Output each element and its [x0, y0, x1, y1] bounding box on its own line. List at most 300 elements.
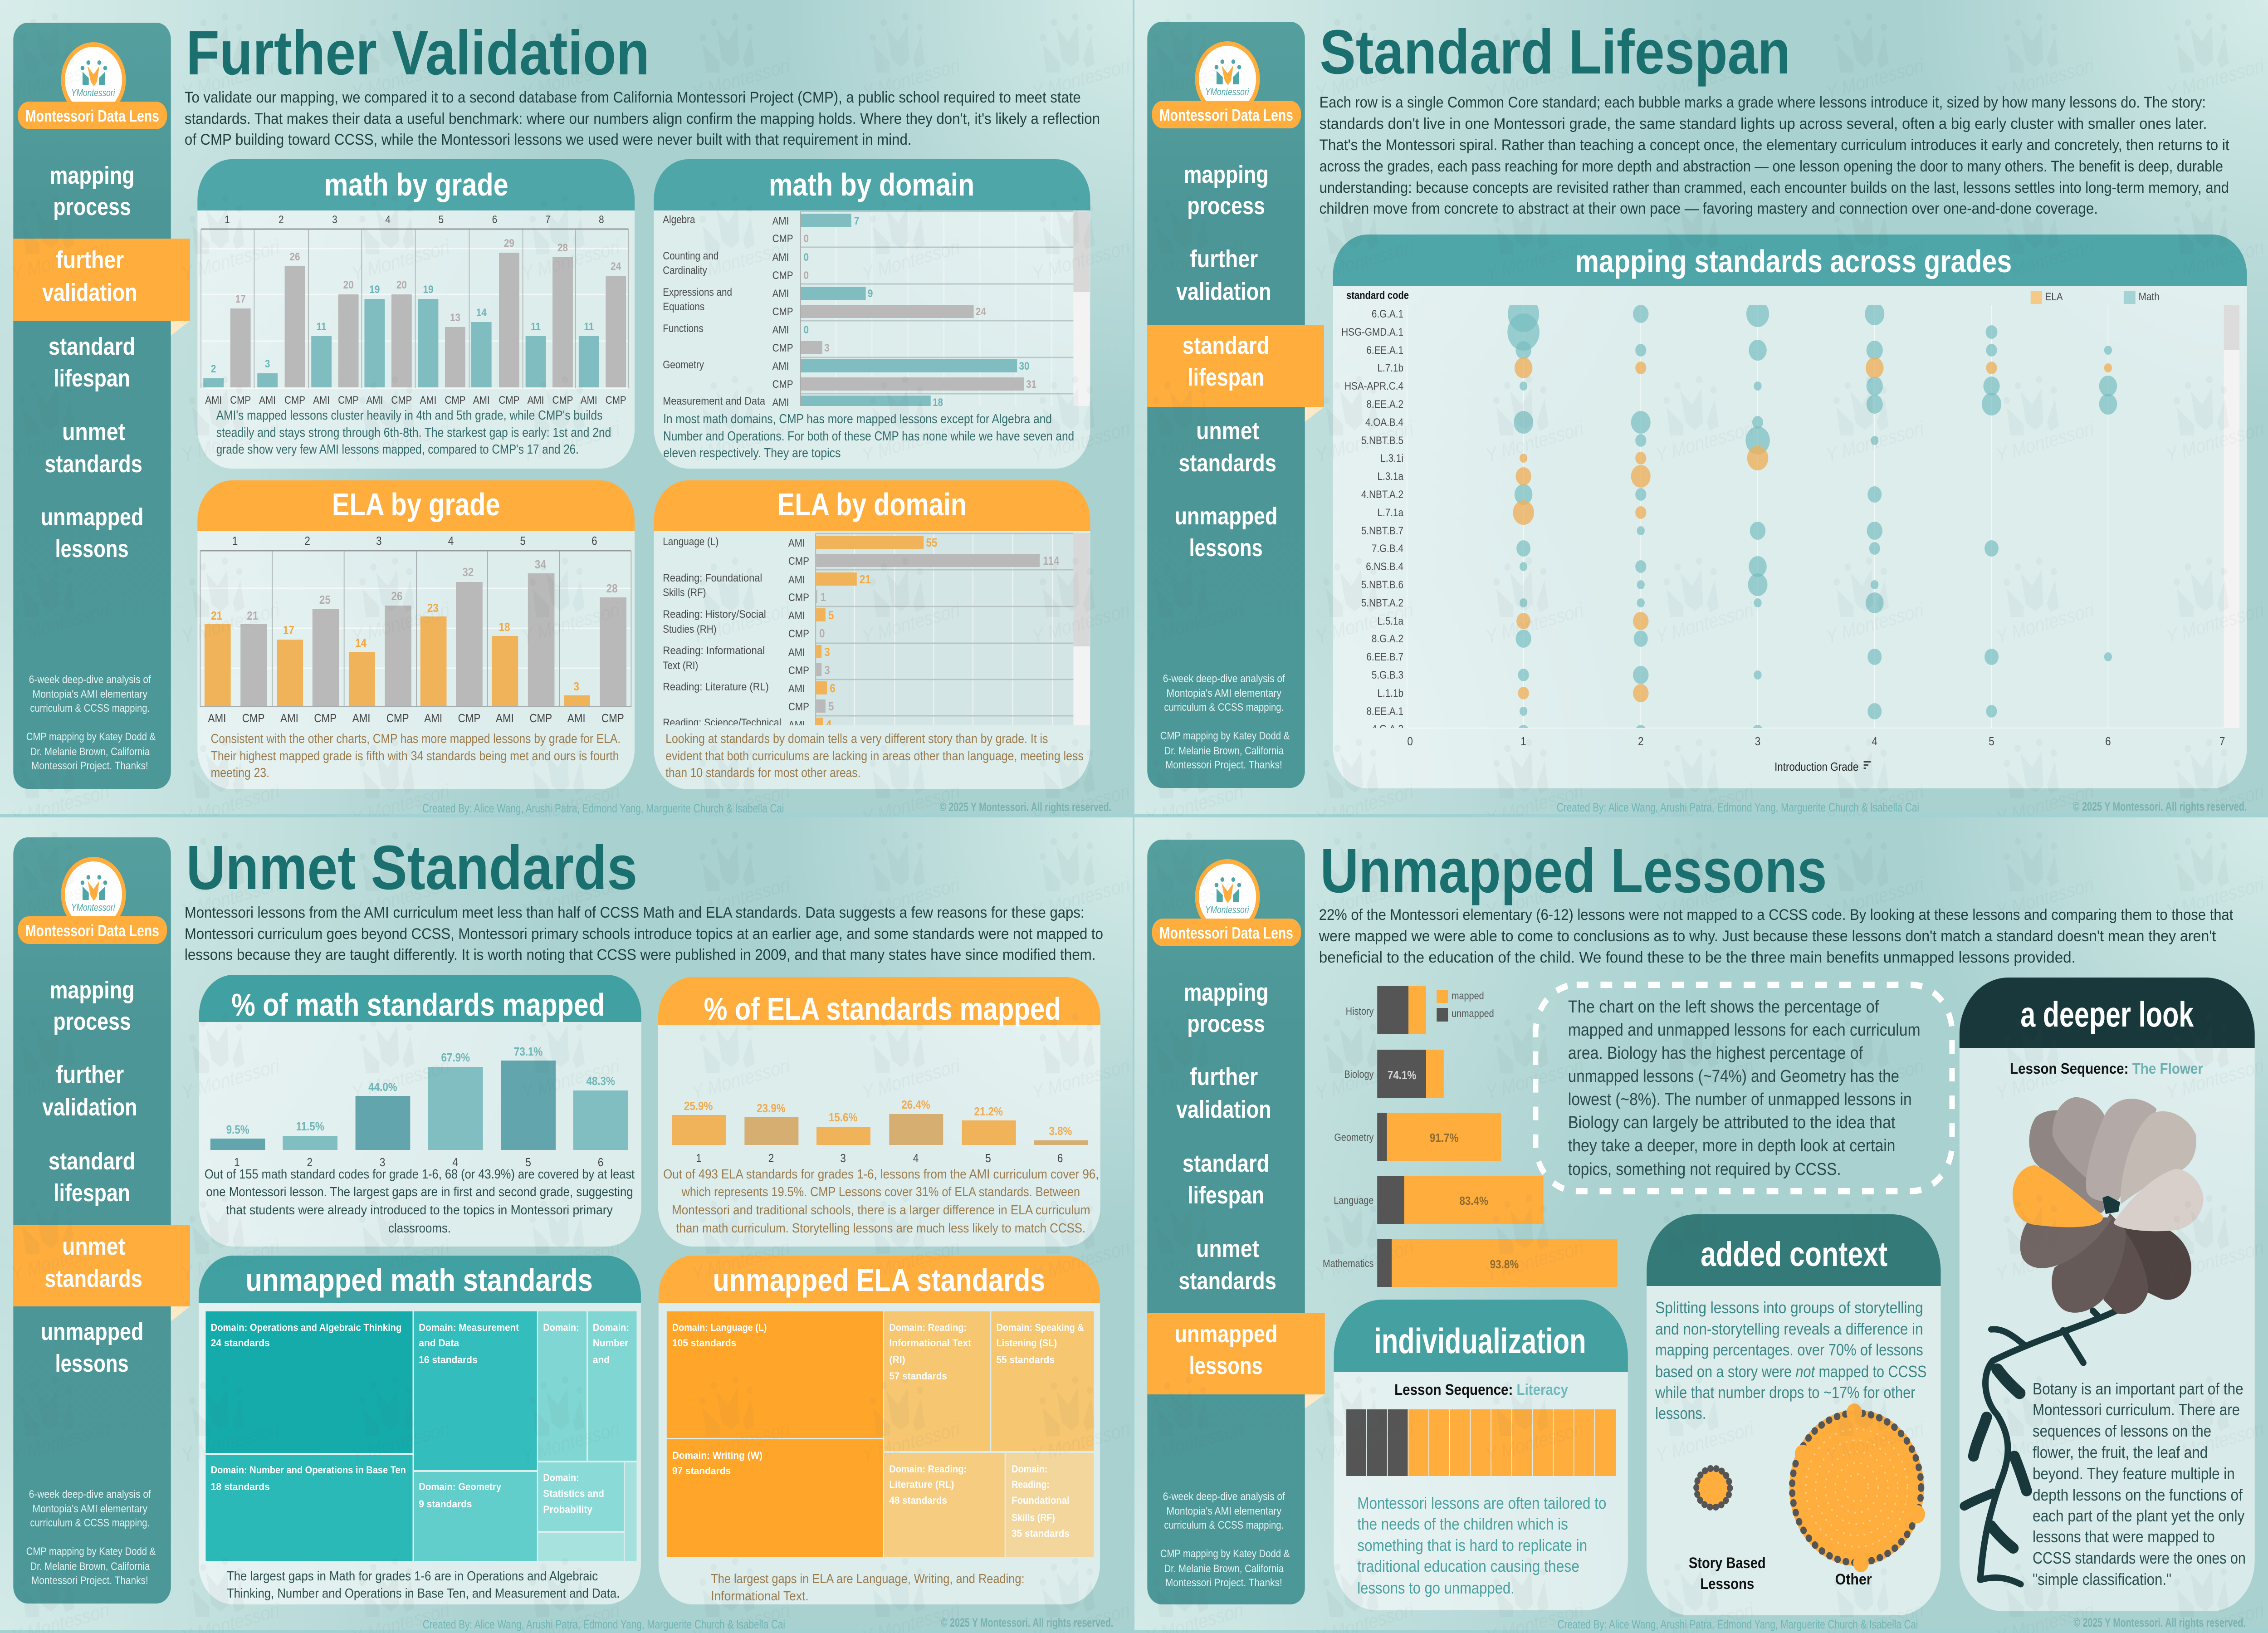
bar chart: Skills (RF) [663, 587, 706, 598]
sidebar credits: CMP mapping by Katey Dodd & [26, 1545, 156, 1557]
text block: "simple classification." [2033, 1571, 2171, 1589]
petals [2013, 1097, 2204, 1314]
lesson sequence label: Lesson Sequence: The Flower [2010, 1060, 2203, 1077]
caption: than math curriculum. Storytelling lessons are much less likely to match CCSS. [676, 1220, 1085, 1235]
column chart: CMP [284, 394, 305, 406]
bar chart [663, 533, 1090, 731]
bar chart: 1 [821, 591, 826, 604]
nav: unmet standards: standards [44, 1265, 142, 1292]
text block: while that number drops to ~17% for other [1655, 1384, 1915, 1402]
footer credits [423, 1616, 1113, 1631]
column chart: 2 [768, 1152, 774, 1165]
intro text [1320, 93, 2229, 217]
bubble chart: 4 [1872, 735, 1877, 748]
text block: and non-storytelling reveals a difference in [1655, 1320, 1923, 1339]
bubble chart: HSA-APR.C.4 [1344, 380, 1403, 392]
watermark [1144, 832, 2267, 1633]
sidebar credits: Montessori Project. Thanks! [1165, 1577, 1282, 1589]
column chart: 25.9% [684, 1100, 713, 1113]
column chart: 3 [265, 358, 270, 370]
sidebar credits: Montopia's AMI elementary [33, 688, 148, 700]
bar chart: 21 [860, 573, 871, 586]
intro text: To validate our mapping, we compared it to a second database from California Montessori Project (CMP), a public school required to meet state [185, 88, 1081, 106]
bar chart: AMI [772, 215, 789, 227]
intro text: understanding: because concepts are revisited rather than crammed, each encounter builds on the last, lessons settles into long-term memory, and [1320, 179, 2229, 196]
caption: meeting 23. [211, 765, 269, 780]
bubble cluster: other lessons [1789, 1403, 1925, 1572]
column chart: CMP [552, 394, 573, 406]
bar chart: 30 [1019, 360, 1030, 372]
treemap: Listening (SL) [997, 1338, 1057, 1349]
bar chart: AMI [788, 719, 805, 731]
bar chart: 9 [868, 288, 873, 299]
callout: dashed box [1535, 985, 1952, 1191]
sidebar credits: 6-week deep-dive analysis of [1163, 1491, 1285, 1502]
nav: unmet standards [44, 418, 142, 478]
logo: YMontessori [1205, 905, 1250, 915]
treemap: (RI) [889, 1354, 905, 1365]
treemap: 48 standards [889, 1495, 947, 1506]
sidebar [13, 23, 190, 789]
panel: % of math standards mapped [199, 975, 641, 1247]
column chart: CMP [458, 712, 480, 725]
nav: unmapped lessons: unmapped [41, 1318, 143, 1345]
sidebar credits: Dr. Melanie Brown, California [1164, 745, 1284, 757]
text block: CCSS standards were the ones on [2033, 1550, 2246, 1568]
bar chart: AMI [772, 251, 789, 263]
nav: unmapped lessons: lessons [55, 535, 129, 562]
bar chart: 114 [1043, 555, 1060, 567]
column chart: AMI [208, 712, 226, 725]
column chart: 3 [332, 214, 337, 225]
bubble chart: 6.NS.B.4 [1366, 561, 1403, 572]
column chart: AMI [259, 394, 276, 406]
bar chart: 7 [854, 215, 859, 227]
column chart: CMP [391, 394, 412, 406]
caption: Informational Text. [711, 1588, 809, 1603]
nav: mapping process: mapping [49, 161, 135, 189]
legend: Math [2139, 291, 2160, 303]
treemap: 57 standards [889, 1371, 947, 1382]
column chart: 11 [317, 321, 327, 332]
column chart: 21 [211, 610, 222, 622]
footer credits: Created By: Alice Wang, Arushi Patra, Edmond Yang, Marguerite Church & Isabella Cai [1557, 801, 1919, 814]
nav: further validation [42, 1061, 137, 1121]
label: story based lessons [1689, 1554, 1766, 1592]
bubble chart: L.7.1b [1377, 362, 1403, 374]
treemap: Domain: [593, 1322, 629, 1333]
sidebar credits [1160, 673, 1290, 771]
column chart: 25 [319, 594, 331, 606]
column chart: 7 [545, 214, 551, 225]
lesson sequence label: Lesson Sequence: Literacy [1394, 1381, 1568, 1398]
bar chart: CMP [772, 233, 793, 244]
intro text: standards don't live in one Montessori grade, the same standard lights up across several, often a big early cluster with smaller ones later. [1320, 115, 2207, 132]
treemap: Domain: Language (L) [672, 1322, 767, 1333]
column chart: 19 [369, 284, 380, 295]
caption [665, 731, 1084, 780]
bar chart: Language (L) [663, 536, 719, 548]
caption: Number and Operations. For both of these CMP has none while we have seven and [663, 428, 1074, 443]
column chart: AMI [473, 394, 490, 406]
column chart: 18 [499, 621, 510, 634]
nav: standard lifespan: lifespan [54, 1179, 130, 1207]
column chart: AMI [313, 394, 330, 406]
nav: further validation: validation [42, 279, 137, 306]
dashboard: standard lifespan [1134, 0, 2268, 816]
bar chart: Reading: Science/Technical [663, 717, 781, 728]
column chart: 73.1% [514, 1046, 543, 1058]
bar chart: CMP [788, 701, 809, 713]
caption: Their highest mapped grade is fifth with 34 standards being met and ours is fourth [211, 748, 619, 763]
bar chart: Geometry [663, 359, 704, 371]
bar chart: CMP [772, 306, 793, 318]
bubble chart: 5.NBT.B.5 [1361, 435, 1403, 446]
text block [1357, 1495, 1606, 1598]
nav: unmet standards [44, 1232, 142, 1292]
sidebar credits: 6-week deep-dive analysis of [29, 674, 151, 685]
column chart: 9.5% [226, 1124, 249, 1136]
treemap: 16 standards [419, 1354, 478, 1365]
intro text: of CMP building toward CCSS, while the Montessori lessons we used were never built with that requirement in mind. [185, 131, 911, 148]
column chart: 13 [450, 312, 460, 323]
bar chart: Reading: Literature (RL) [663, 681, 769, 693]
nav: mapping process: mapping [1183, 978, 1269, 1006]
nav: unmet standards: standards [1178, 1267, 1276, 1295]
sidebar credits: Montopia's AMI elementary [1167, 687, 1282, 699]
stacked bar chart: mapped vs unmapped: Biology [1344, 1069, 1374, 1080]
text block: lessons to go unmapped. [1357, 1579, 1515, 1598]
bar chart: 3 [824, 646, 830, 659]
footer credits: Created By: Alice Wang, Arushi Patra, Edmond Yang, Marguerite Church & Isabella Cai [1558, 1618, 1918, 1631]
nav: unmet standards: unmet [1196, 1235, 1259, 1262]
panel: mapping standards across grades [1333, 235, 2247, 788]
bar chart: 3 [824, 664, 830, 677]
column chart: CMP [499, 394, 519, 406]
bar chart: 31 [1026, 378, 1036, 390]
column chart: 6 [1057, 1152, 1063, 1165]
caption [663, 411, 1074, 460]
bubble chart: 8.EE.A.2 [1366, 398, 1403, 410]
column chart: 21.2% [974, 1105, 1003, 1118]
treemap: Domain: [543, 1322, 579, 1333]
column chart: 11 [531, 321, 541, 332]
column chart [201, 214, 628, 406]
nav: mapping process: mapping [1183, 161, 1269, 188]
bubble chart: L.7.1a [1377, 507, 1403, 518]
nav: unmet standards [1178, 417, 1276, 477]
panel: ELA by grade [197, 480, 635, 789]
intro text [185, 88, 1100, 148]
intro text: That's the Montessori spiral. Rather than teaching a concept once, the elementary curriculum introduces it early and concretely, then returns to it [1320, 136, 2229, 153]
nav: mapping process [49, 976, 135, 1035]
text block [1655, 1299, 1926, 1423]
bubble chart: 6.EE.A.1 [1366, 344, 1403, 356]
nav: standard lifespan: standard [1183, 332, 1269, 359]
icon: sort [1864, 761, 1871, 769]
column chart: AMI [581, 394, 597, 406]
column chart: 44.0% [368, 1081, 397, 1094]
column chart: 2 [307, 1156, 313, 1169]
bar chart: CMP [772, 342, 793, 354]
caption: Looking at standards by domain tells a very different story than by grade. It is [665, 731, 1048, 746]
column chart: 3 [380, 1156, 385, 1169]
intro text [1319, 906, 2233, 966]
treemap: Literature (RL) [889, 1479, 954, 1490]
treemap: and Data [419, 1338, 459, 1349]
treemap: Domain: [1012, 1464, 1047, 1475]
badge: Montessori Data Lens [18, 916, 167, 944]
column chart: 24 [611, 260, 621, 272]
text block [2033, 1380, 2246, 1589]
footer credits: Created By: Alice Wang, Arushi Patra, Edmond Yang, Marguerite Church & Isabella Cai [423, 1618, 785, 1631]
bubble chart [1341, 289, 2239, 773]
sidebar credits: Montessori Project. Thanks! [31, 760, 148, 772]
bar chart: Counting and [663, 250, 719, 262]
dashboard: further validation [0, 0, 1134, 816]
nav: standard lifespan: lifespan [54, 364, 130, 392]
nav: unmapped lessons: lessons [55, 1349, 129, 1377]
footer credits [1558, 1616, 2246, 1631]
badge: Montessori Data Lens [1152, 101, 1301, 128]
bar chart: AMI [772, 396, 789, 408]
badge: Montessori Data Lens: Montessori Data Lens [25, 108, 159, 126]
sidebar credits: curriculum & CCSS mapping. [1164, 701, 1284, 713]
column chart: 14 [355, 637, 367, 650]
treemap [667, 1311, 1094, 1557]
nav: standard lifespan [49, 1147, 135, 1207]
column chart: AMI [496, 712, 514, 725]
bubble chart: 0 [1407, 735, 1413, 748]
column chart: AMI [280, 712, 298, 725]
column chart: 23.9% [757, 1102, 786, 1115]
bar chart: 4 [826, 719, 832, 731]
column chart: 20 [343, 279, 354, 291]
heading: added context [1701, 1236, 1887, 1274]
text block: Splitting lessons into groups of storytelling [1655, 1299, 1923, 1317]
panel: added context [1647, 1214, 1941, 1615]
column chart: 5 [520, 535, 526, 548]
heading: ELA by grade [332, 487, 500, 522]
sidebar credits [26, 1488, 156, 1586]
intro text: children move from concrete to abstract at their own pace — favoring mastery and connection over one-and-done coverage. [1320, 200, 2098, 217]
bubble chart: 7.G.B.4 [1372, 543, 1403, 554]
callout: dashed box: lowest (~8%). The number of unmapped lessons in [1568, 1090, 1912, 1109]
column chart: 26 [290, 251, 300, 263]
heading: % of ELA standards mapped [704, 991, 1061, 1027]
nav: further validation: further [1190, 245, 1258, 273]
nav: unmapped lessons: unmapped [41, 503, 143, 531]
caption: grade show very few AMI lessons mapped, compared to CMP's 17 and 26. [216, 441, 579, 456]
dashboard: unmapped lessons [1134, 816, 2268, 1633]
text block: the needs of the children which is [1357, 1516, 1568, 1534]
column chart: 1 [234, 1156, 240, 1169]
column chart: 34 [535, 558, 546, 571]
bar chart: AMI [788, 537, 805, 549]
treemap: Domain: Operations and Algebraic Thinking [211, 1322, 401, 1333]
nav: unmet standards: unmet [62, 418, 125, 445]
text block: based on a story were not mapped to CCSS [1655, 1363, 1926, 1381]
caption: steadily and stays strong through 6th-8th. The starkest gap is early: 1st and 2nd [216, 425, 611, 440]
column chart: 3 [573, 680, 579, 693]
treemap: Domain: Geometry [419, 1481, 502, 1492]
bar chart: 0 [819, 627, 825, 640]
caption: In most math domains, CMP has more mapped lessons except for Algebra and [663, 411, 1052, 426]
treemap: Domain: Measurement [419, 1322, 519, 1333]
legend: ELA [2045, 291, 2063, 303]
bar chart: 0 [804, 324, 809, 336]
bar chart: 55 [926, 537, 937, 549]
caption [227, 1568, 620, 1600]
nav: mapping process [1183, 161, 1269, 220]
column chart: 67.9% [441, 1051, 470, 1064]
heading: math by domain [769, 167, 974, 202]
watermark [10, 832, 1133, 1633]
sidebar credits: Montessori Project. Thanks! [1165, 759, 1282, 771]
active tab: further validation [13, 239, 190, 336]
nav: mapping process: mapping [49, 976, 135, 1004]
nav: unmet standards [1178, 1235, 1276, 1295]
bar chart: 0 [804, 251, 809, 263]
sidebar credits: Dr. Melanie Brown, California [1164, 1563, 1284, 1574]
column chart: 21 [247, 610, 258, 622]
bar chart: CMP [772, 269, 793, 281]
bar chart: Cardinality [663, 264, 708, 276]
treemap: Probability [543, 1504, 593, 1515]
callout: dashed box: area. Biology has the highest percentage of [1568, 1043, 1863, 1063]
bubble cluster: story based lessons [1695, 1467, 1731, 1509]
text block: something that is hard to replicate in [1357, 1537, 1587, 1555]
column chart: 19 [423, 284, 433, 295]
stacked bar chart: mapped vs unmapped: 93.8% [1490, 1258, 1519, 1271]
legend [2031, 291, 2160, 304]
legend: mapped [1452, 990, 1484, 1002]
bubble chart: 6.EE.B.7 [1366, 651, 1403, 663]
caption: which represents 19.5%. CMP Lessons cover 31% of ELA standards. Between [681, 1184, 1080, 1199]
heading: unmapped ELA standards [713, 1262, 1045, 1298]
nav: unmapped lessons [41, 1318, 143, 1377]
treemap: 24 standards [211, 1338, 270, 1349]
column chart: 17 [283, 624, 294, 637]
intro text: Montessori curriculum goes beyond CCSS, Montessori primary schools introduce topics at an earlier age, and some standards were not mapped to [185, 925, 1103, 942]
bar chart: 0 [804, 233, 809, 244]
bar chart: CMP [788, 665, 809, 676]
heading: mapping standards across grades [1575, 244, 2012, 279]
heading: % of math standards mapped [231, 987, 605, 1022]
sidebar credits: 6-week deep-dive analysis of [1163, 673, 1285, 684]
caption: one Montessori lesson. The largest gaps are in first and second grade, suggesting [206, 1184, 633, 1199]
treemap: Reading: [1012, 1479, 1050, 1490]
bar chart: AMI [772, 288, 789, 299]
nav: standard lifespan: lifespan [1188, 363, 1264, 391]
column chart: CMP [606, 394, 626, 406]
column chart: 3 [376, 535, 382, 548]
treemap: Domain: [543, 1472, 579, 1483]
sidebar credits: Montessori Project. Thanks! [31, 1574, 148, 1586]
bar chart: 0 [804, 269, 809, 281]
bar chart: Equations [663, 301, 704, 313]
column chart [210, 1046, 628, 1169]
sidebar credits: Dr. Melanie Brown, California [30, 746, 150, 758]
panel: individualization [1334, 1300, 1628, 1610]
nav: mapping process [49, 161, 135, 220]
sidebar [1147, 840, 1325, 1604]
column chart: 4 [452, 1156, 458, 1169]
stacked bar chart: mapped vs unmapped: History [1346, 1006, 1374, 1017]
column chart: 17 [235, 293, 246, 305]
caption: than 10 standards for most other areas. [665, 765, 860, 780]
column chart: AMI [366, 394, 383, 406]
intro text [185, 904, 1103, 963]
sidebar credits: Montopia's AMI elementary [1167, 1505, 1282, 1517]
panel: math by domain [654, 159, 1090, 469]
nav: unmapped lessons [1175, 502, 1277, 562]
sidebar credits: Dr. Melanie Brown, California [30, 1560, 150, 1572]
stacked bar chart: mapped vs unmapped [1323, 986, 1618, 1287]
bar chart: 6 [830, 682, 836, 695]
nav: further validation: validation [42, 1093, 137, 1121]
text block: depth lessons on the functions of [2033, 1486, 2243, 1505]
column chart: 1 [696, 1152, 702, 1165]
nav: unmapped lessons [1175, 1320, 1277, 1379]
column chart: 4 [913, 1152, 919, 1165]
column chart: AMI [567, 712, 586, 725]
nav: standard lifespan: standard [49, 332, 135, 360]
column chart: 2 [211, 363, 216, 375]
text block: flower, the fruit, the leaf and [2033, 1444, 2208, 1462]
stacked bar chart: mapped vs unmapped: Language [1334, 1195, 1374, 1206]
panel: unmapped ELA standards [659, 1256, 1100, 1604]
column chart: CMP [529, 712, 552, 725]
bubble chart: 7 [2219, 735, 2225, 748]
column chart: 5 [439, 214, 444, 225]
heading: unmapped math standards [245, 1262, 593, 1298]
callout: dashed box: topics, something not required by CCSS. [1568, 1159, 1841, 1179]
bubble chart: 6.G.A.1 [1372, 308, 1403, 320]
bubble chart: L.1.1b [1377, 687, 1403, 699]
column chart: 11.5% [296, 1120, 324, 1133]
text block: traditional education causing these [1357, 1558, 1579, 1576]
caption: AMI's mapped lessons cluster heavily in 4th and 5th grade, while CMP's builds [216, 407, 602, 422]
bubble chart: 4.NBT.A.2 [1361, 489, 1403, 500]
column chart: 28 [557, 242, 568, 254]
heading: a deeper look [2020, 995, 2194, 1034]
logo: YMontessori [1205, 87, 1250, 98]
caption: Consistent with the other charts, CMP has more mapped lessons by grade for ELA. [211, 731, 621, 746]
nav: further validation [42, 246, 137, 306]
column chart: 5 [525, 1156, 531, 1169]
treemap [205, 1311, 636, 1561]
bar chart: Text (RI) [663, 660, 698, 671]
stem and leaves [1964, 1311, 2116, 1584]
nav: unmet standards: unmet [1196, 417, 1259, 445]
text block: lessons that were mapped to [2033, 1528, 2215, 1546]
bar chart [663, 211, 1090, 408]
footer credits [1557, 800, 2247, 814]
logo [63, 859, 124, 930]
treemap: 18 standards [211, 1481, 270, 1492]
bubble chart: 5.NBT.B.6 [1361, 579, 1403, 591]
nav: further validation: validation [1176, 278, 1271, 305]
caption: The largest gaps in Math for grades 1-6 are in Operations and Algebraic [227, 1568, 598, 1583]
treemap: Domain: Speaking & [997, 1322, 1084, 1333]
sidebar [13, 837, 190, 1604]
treemap: Domain: Writing (W) [672, 1450, 763, 1461]
sidebar credits: CMP mapping by Katey Dodd & [26, 731, 156, 743]
panel: ELA by domain [654, 480, 1090, 789]
intro text: lessons because they are taught differently. It is worth noting that CCSS were published in 2009, and that many states have since modified them. [185, 946, 1096, 963]
nav: standard lifespan [49, 332, 135, 392]
